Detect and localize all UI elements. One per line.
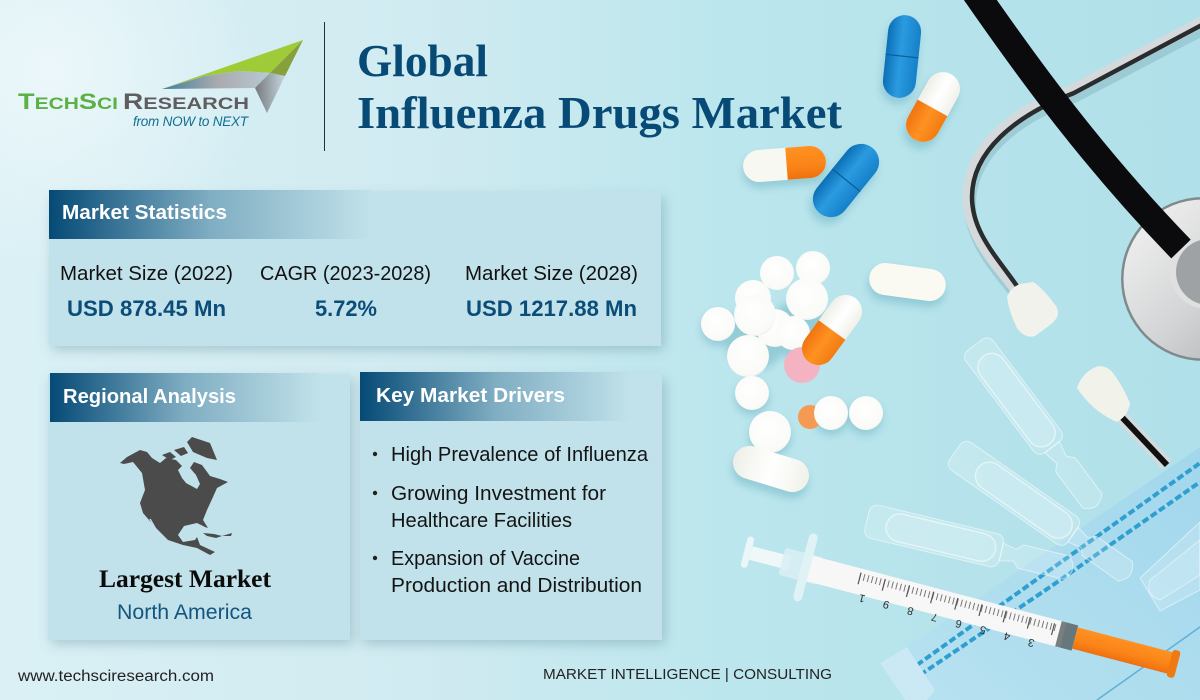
panel: regional analysis <box>48 373 353 644</box>
black tube <box>972 0 1181 249</box>
icon: white capsule <box>867 261 948 303</box>
icon: orange and white capsule top <box>900 66 966 148</box>
icon: blue capsule diagonal <box>806 137 886 224</box>
heading: regional analysis <box>50 373 320 422</box>
icon: blue capsule top <box>881 14 923 99</box>
lower stethoscope tube <box>1118 413 1167 465</box>
stat: market size 2022 <box>60 263 233 321</box>
syringe scale numbers: 1 <box>858 591 867 604</box>
driver list: Production and Distribution <box>391 575 642 597</box>
ampoule middle <box>945 438 1140 589</box>
logo: TechSci Research <box>18 40 303 129</box>
stat: market size 2028: USD 1217.88 Mn <box>466 296 637 321</box>
driver list <box>373 444 649 597</box>
stat: market size 2022: Market Size (2022) <box>60 263 233 285</box>
heading: regional analysis: Regional Analysis <box>63 386 236 408</box>
stat: market size 2022: USD 878.45 Mn <box>67 296 226 321</box>
photo: pills and tablets <box>701 14 966 503</box>
ampoule right <box>1140 522 1200 611</box>
title: Global <box>357 35 488 86</box>
photo: syringe <box>735 517 1186 699</box>
photo: glass ampoules <box>863 335 1200 611</box>
icon: white and orange capsule left <box>742 145 827 183</box>
driver list: Growing Investment for <box>391 483 606 505</box>
syringe scale numbers: 7 <box>930 610 939 623</box>
header divider <box>324 22 325 151</box>
syringe scale numbers: 4 <box>1003 629 1012 642</box>
chest piece <box>1121 197 1200 361</box>
ampoule lower <box>863 503 1077 586</box>
stat: CAGR <box>260 263 431 321</box>
syringe scale numbers: 5 <box>979 623 988 636</box>
heading: key market drivers <box>360 372 630 421</box>
logo: TechSci Research: TECH SCI <box>18 89 118 114</box>
title <box>357 35 843 138</box>
icon: orange and white capsule in cluster <box>795 288 869 372</box>
icon: North America map <box>120 437 232 555</box>
syringe scale numbers: 3 <box>1027 636 1036 649</box>
stat: CAGR: 5.72% <box>315 296 377 321</box>
ampoule top <box>961 335 1110 516</box>
logo: TechSci Research: R ESEARCH <box>123 89 249 114</box>
photo: stethoscope <box>968 0 1200 465</box>
syringe scale numbers <box>858 591 1036 649</box>
photo: surgical mask <box>880 447 1200 700</box>
heading: key market drivers: Key Market Drivers <box>376 385 565 407</box>
syringe scale numbers: 8 <box>906 604 915 617</box>
heading: market statistics <box>49 190 371 239</box>
driver list: Healthcare Facilities <box>391 510 572 532</box>
stat: market size 2028: Market Size (2028) <box>465 263 638 285</box>
ear tip upper <box>1007 282 1058 337</box>
footer: tagline: MARKET INTELLIGENCE | CONSULTING <box>543 666 832 683</box>
ear tip lower <box>1077 366 1130 422</box>
panel: market statistics <box>49 190 664 350</box>
driver list: High Prevalence of Influenza <box>391 444 649 466</box>
heading: market statistics: Market Statistics <box>62 202 227 224</box>
stat: CAGR: CAGR (2023-2028) <box>260 263 431 285</box>
title: Influenza Drugs Market <box>357 87 843 138</box>
driver list: Expansion of Vaccine <box>391 548 580 570</box>
icon: white capsule bottom <box>729 442 813 496</box>
text: North America: North America <box>117 601 252 624</box>
footer: website: www.techsciresearch.com <box>17 668 214 685</box>
syringe scale numbers: 9 <box>882 597 891 611</box>
pill shadows <box>701 20 964 503</box>
icon: tablet cluster <box>701 251 883 453</box>
logo: TechSci Research: from NOW to NEXT <box>133 114 250 129</box>
stat: market size 2028 <box>465 263 638 321</box>
syringe scale numbers: 6 <box>954 617 963 630</box>
panel: key market drivers <box>360 372 665 644</box>
text: largest market: Largest Market <box>99 566 272 593</box>
